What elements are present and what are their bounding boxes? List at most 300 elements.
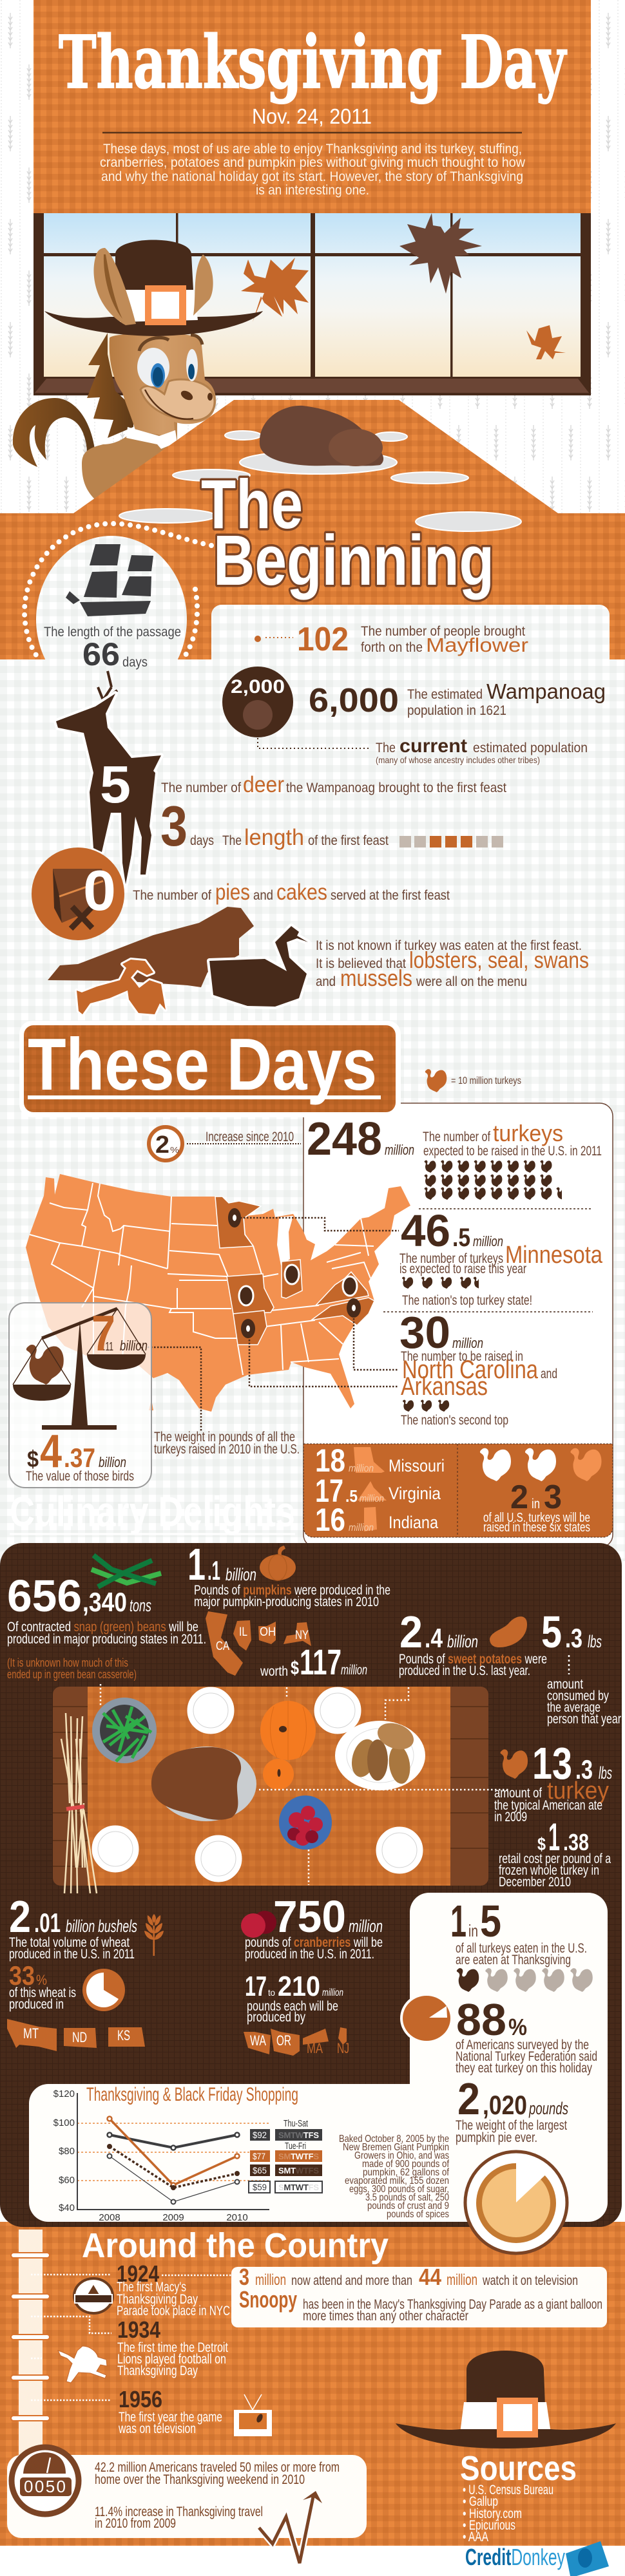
stat: wheat: 2 — [9, 1891, 31, 1942]
stat: 248 million — [307, 1113, 602, 1200]
text: weight caption — [154, 1430, 300, 1457]
callout: macy's parade: 3 — [239, 2264, 249, 2290]
line: dotted brown — [107, 2144, 240, 2190]
stat: wampanoag population: 2,000 — [231, 676, 285, 697]
illustration: pumpkin pie — [465, 2152, 567, 2253]
stat: cranberries — [241, 1891, 383, 2056]
panel: turkey weight and value: .37 — [64, 1443, 95, 1473]
panel: turkey weight and value: billion — [120, 1338, 148, 1354]
callout: macy's parade: million — [255, 2271, 286, 2289]
stat: turkey consumed: in 2009 — [494, 1810, 527, 1824]
passage stat: 66 — [82, 636, 120, 672]
two in three turkeys — [480, 1448, 602, 1535]
plates — [92, 1687, 423, 1882]
stat: largest pumpkin pie: pounds — [528, 2099, 568, 2118]
stat: sweet potatoes: lbs — [588, 1632, 602, 1651]
callout: macy's parade: 44 — [419, 2264, 441, 2290]
stat: turkey consumed: amount of — [494, 1786, 542, 1801]
stat: pies and cakes text: and — [253, 888, 273, 903]
stat: cranberries: to — [268, 1987, 275, 1998]
stat: largest pumpkin pie: eggs, 300 pounds of sugar, — [349, 2184, 449, 2195]
stat: retail cost — [499, 1815, 611, 1889]
logo: creditdonkey: CreditDonkey — [465, 2544, 565, 2570]
panel: culinary delights — [0, 1539, 622, 2253]
plates — [119, 431, 521, 531]
stat: north carolina and arkansas: million — [452, 1335, 483, 1351]
price tags and weekday bars: $65 — [253, 2165, 267, 2175]
icon: crossed-out pie with 0 — [32, 848, 124, 940]
price tags and weekday bars: Tue-Fri — [285, 2141, 306, 2152]
cranberry states: OR — [276, 2032, 291, 2049]
stat: deer text: the Wampanoag brought to the first feast — [286, 781, 506, 795]
stat: sweet potatoes: 2 — [399, 1607, 423, 1657]
stat: north carolina and arkansas: 30 — [399, 1307, 450, 1358]
passage stat: days — [122, 655, 148, 670]
white stats panel — [211, 605, 610, 798]
sources: • History.com — [463, 2506, 522, 2521]
wheat states: ND — [72, 2029, 87, 2045]
stat: wampanoag population: population in 1621 — [407, 703, 506, 718]
timeline: 1956: was on television — [118, 2421, 196, 2436]
panel: header — [34, 0, 591, 214]
panel: top states — [303, 1443, 613, 1538]
week squares — [399, 836, 503, 848]
cranberry states — [244, 2027, 349, 2056]
icon: odometer — [12, 2447, 79, 2514]
heading: the beginning: Beginning — [213, 521, 494, 600]
stat: largest pumpkin pie: 3.5 pounds of salt, 250 — [365, 2192, 449, 2203]
cranberry states: WA — [250, 2032, 266, 2049]
mane — [87, 333, 133, 438]
price tags and weekday bars: Thu-Sat — [284, 2118, 309, 2129]
indiana: million — [349, 1522, 374, 1533]
icon: wheat — [144, 1914, 164, 1956]
stat: 102 people: The number of people brought — [361, 624, 525, 639]
timeline: 1924: Thanksgiving Day — [117, 2292, 198, 2307]
stat: pies and cakes text: cakes — [276, 880, 327, 905]
stat: pies and cakes text: The number of — [133, 888, 211, 903]
stat: largest pumpkin pie: pounds of crust and 9 — [367, 2201, 449, 2211]
character: donkey in pilgrim hat — [13, 240, 263, 501]
stat: 102 people: forth on the — [361, 640, 423, 655]
text: first feast menu — [316, 938, 589, 991]
icon: pilgrim hat — [396, 2351, 616, 2448]
stat: north carolina and arkansas: North Carolina — [402, 1356, 539, 1384]
missouri — [315, 1443, 445, 1479]
sources: • AAA — [463, 2530, 488, 2544]
intro paragraph: is an interesting one. — [256, 183, 369, 198]
logo: creditdonkey — [465, 2541, 609, 2576]
timeline: 1956: 1956 — [119, 2386, 162, 2412]
panel: turkey weight and value: .11 — [103, 1340, 113, 1353]
stat: deer text — [161, 772, 506, 797]
body — [82, 419, 177, 501]
sources: • U.S. Census Bureau — [463, 2483, 553, 2497]
timeline: 1956 — [118, 2386, 272, 2436]
sources — [460, 2449, 577, 2544]
two in three turkeys: raised in these six states — [483, 1520, 590, 1535]
icon: deer with 5 — [56, 671, 161, 884]
stat: 3 days feast: of the first feast — [308, 833, 389, 848]
stat: green beans: tons — [130, 1596, 151, 1615]
stat: wampanoag population: current — [399, 735, 467, 757]
panel: turkey weight and value: $ — [27, 1446, 39, 1472]
stat: wheat: .01 — [34, 1908, 61, 1938]
stat: largest pumpkin pie: made of 900 pounds of — [362, 2159, 449, 2170]
price tags and weekday bars: SMTWTFS — [278, 2130, 319, 2140]
oval — [36, 536, 187, 703]
heading: the beginning — [201, 465, 494, 600]
stat: 88 percent: 88 — [456, 1994, 506, 2045]
two in three turkeys: 2 — [510, 1479, 528, 1516]
stat: sweet potatoes: amount — [547, 1677, 583, 1692]
sources: • Gallup — [463, 2494, 498, 2509]
passage stat: The length of the passage — [44, 625, 181, 639]
callout: macy's parade: now attend and more than — [291, 2273, 412, 2288]
platter and roast turkey — [151, 1747, 256, 1821]
icon: pumpkin — [260, 1546, 296, 1580]
stat: 102 people — [255, 621, 528, 658]
text: weight caption: turkeys raised in 2010 in the U.S. — [154, 1442, 300, 1457]
stat: deer text: The number of — [161, 781, 241, 795]
chart: thanksgiving and black friday shopping: Thanksgiving & Black Friday Shopping — [86, 2084, 298, 2105]
pumpkin states: 117 — [300, 1642, 341, 1682]
stat: 88 percent: % — [508, 2014, 527, 2040]
virginia — [315, 1473, 441, 1509]
stat: green beans: produced in major producing states in 2011. — [7, 1632, 206, 1647]
text: first feast menu: were all on the menu — [416, 974, 527, 989]
stat: cranberries: produced by — [247, 2010, 305, 2025]
heading: culinary delights (faint): Culinary Delights — [10, 1488, 295, 1535]
panel: turkey facts — [9, 1021, 613, 1548]
pumpkin states: IL — [239, 1625, 247, 1639]
stat: wampanoag population — [222, 667, 606, 765]
icon: mayflower ship — [66, 544, 153, 616]
timeline: 1924: The first Macy's — [117, 2280, 186, 2295]
cranberry states: MA — [307, 2040, 323, 2056]
price tags and weekday bars: SMTWTFS — [278, 2152, 319, 2161]
stat: 2 percent increase: Increase since 2010 — [206, 1130, 294, 1144]
pumpkin states: $ — [291, 1658, 299, 1679]
virginia: million — [360, 1493, 384, 1504]
pumpkin states: million — [341, 1663, 367, 1678]
state markers — [228, 1208, 361, 1338]
icon: swan — [209, 926, 308, 1007]
panel: turkey weight and value: 4 — [40, 1426, 62, 1477]
panel: travel: in 2010 from 2009 — [95, 2516, 176, 2531]
line: thin grey — [107, 2154, 240, 2204]
stat: 248 million: The number of — [423, 1130, 490, 1144]
stat: largest pumpkin pie: pounds of spices — [387, 2209, 449, 2220]
stat: green beans: ,340 — [82, 1587, 127, 1617]
virginia: Virginia — [389, 1484, 441, 1503]
stat: pies and cakes text: pies — [215, 880, 250, 905]
stat: wampanoag population: Wampanoag — [486, 679, 606, 703]
bowl of green beans — [92, 1698, 157, 1763]
stat: turkey consumed — [494, 1738, 612, 1824]
timeline: 1934: Lions played football on — [117, 2352, 226, 2367]
small pumpkin — [263, 1759, 294, 1790]
text: first feast menu: and — [316, 974, 336, 989]
big pumpkin — [260, 1701, 316, 1760]
indiana — [315, 1502, 439, 1538]
window with falling leaves — [34, 213, 591, 395]
intro paragraph: cranberries, potatoes and pumpkin pies without giving much thought to how — [100, 155, 526, 170]
stat: sweet potatoes: .4 — [425, 1623, 443, 1653]
stat: north carolina and arkansas — [399, 1307, 557, 1428]
stat: largest pumpkin pie: pumpkin, 62 gallons of — [363, 2167, 449, 2178]
icon: lobster — [77, 960, 166, 1014]
stat: 1 in 5 turkeys: in — [468, 1921, 478, 1940]
stat: retail cost: .38 — [563, 1829, 589, 1855]
pumpkin states: OH — [260, 1625, 276, 1639]
pie: 33 percent — [82, 1969, 125, 2011]
wheat states: MT — [23, 2025, 39, 2041]
virginia: 17 — [315, 1473, 343, 1509]
sources: Sources — [460, 2449, 577, 2488]
price tags and weekday bars: SMTWTFS — [278, 2183, 319, 2192]
two in three turkeys: of all U.S. turkeys will be — [483, 1511, 590, 1525]
stat: green beans: Of contracted snap (green) beans will be — [7, 1620, 198, 1634]
stat: 3 days feast: days — [190, 833, 214, 848]
bowl of cranberries — [279, 1795, 332, 1850]
chart: thanksgiving and black friday shopping: $80 — [59, 2146, 75, 2157]
passage stat — [44, 625, 181, 672]
legend: 10 million turkeys: = 10 million turkeys — [451, 1075, 521, 1086]
stat: 3 days feast — [160, 794, 503, 858]
panel: travel — [7, 2447, 367, 2538]
price tags and weekday bars: $92 — [253, 2130, 267, 2140]
white panels — [29, 1893, 608, 2222]
stat: minnesota: The nation's top turkey state! — [402, 1293, 532, 1308]
chart: thanksgiving and black friday shopping: 2009 — [162, 2212, 184, 2223]
timeline: 1924 — [31, 2260, 231, 2400]
stat: 1 in 5 turkeys: are eaten at Thanksgiving — [456, 1953, 571, 1967]
stat: 2 percent increase: % — [170, 1145, 180, 1155]
icon: odometer: 0050 — [24, 2477, 66, 2496]
table with turkey — [73, 400, 558, 531]
stat: 102 people: 102 — [297, 621, 349, 658]
stat: north carolina and arkansas: Arkansas — [401, 1372, 488, 1401]
price tags and weekday bars: $77 — [253, 2151, 265, 2161]
stat: north carolina and arkansas: The nation's second top — [401, 1413, 508, 1428]
head — [110, 334, 216, 438]
heading: the beginning: The — [201, 465, 303, 543]
roast turkey — [260, 406, 383, 466]
stat: turkey consumed: 13 — [532, 1738, 572, 1788]
timeline: 1956: The first year the game — [119, 2410, 222, 2425]
intro paragraph: These days, most of us are able to enjoy Thanksgiving and its turkey, stuffing, — [103, 142, 522, 156]
stat: pies and cakes text: served at the first feast — [331, 888, 450, 903]
stat: cranberries: pounds of cranberries will be — [245, 1935, 383, 1950]
indiana: 16 — [315, 1502, 345, 1538]
callout: macy's parade: more times than any other character — [303, 2309, 468, 2324]
stat: pumpkins: .1 — [207, 1555, 220, 1586]
virginia: .5 — [345, 1486, 358, 1506]
missouri: Missouri — [389, 1456, 445, 1475]
intro paragraph: and why the national holiday got its start. However, the story of Thanksgiving — [101, 169, 523, 184]
connector lines — [148, 1218, 399, 1432]
stat: wheat: produced in the U.S. in 2011 — [9, 1947, 135, 1962]
panel: travel: home over the Thanksgiving weekend in 2010 — [95, 2472, 305, 2487]
stat: cranberries: 17 — [245, 1971, 267, 2002]
stat: 102 people: Mayflower — [426, 634, 528, 656]
timeline bar — [11, 2230, 50, 2481]
callout: macy's parade: watch it on television — [482, 2273, 578, 2288]
price tags and weekday bars — [249, 2118, 322, 2193]
wheat states — [7, 2019, 145, 2051]
stat: sweet potatoes: .3 — [565, 1623, 582, 1653]
stat: pumpkins: Pounds of pumpkins were produced in the — [194, 1583, 390, 1598]
plate of sweet potatoes — [335, 1718, 425, 1790]
illustration: dinner table from above — [53, 1684, 510, 1893]
wheat bundle — [61, 1713, 97, 1893]
panel: turkey weight and value: The value of those birds — [26, 1469, 134, 1484]
stat: 2 percent increase — [149, 1127, 301, 1160]
icon: orange leaf — [241, 258, 309, 322]
panel: turkey weight and value: billion — [99, 1454, 126, 1470]
stat: largest pumpkin pie: pumpkin pie ever. — [456, 2130, 537, 2145]
icon: parade badge — [74, 2278, 113, 2313]
stat: wheat: of this wheat is — [9, 1985, 76, 2000]
stat: pumpkins: 1 — [188, 1539, 206, 1589]
pumpkin states: worth — [260, 1664, 288, 1679]
chart: thanksgiving and black friday shopping: 2010 — [226, 2212, 248, 2223]
intro paragraph — [100, 142, 526, 198]
missouri: 18 — [315, 1443, 345, 1479]
text: first feast menu: mussels — [340, 965, 412, 991]
stat: 2 percent increase: 2 — [155, 1132, 169, 1159]
stat: cranberries: produced in the U.S. in 2011. — [245, 1947, 374, 1962]
stat: largest pumpkin pie: Growers in Ohio, and was — [354, 2150, 449, 2161]
stat: pies and cakes text — [133, 880, 450, 905]
price tags and weekday bars: $59 — [253, 2182, 267, 2192]
stat: green beans: 656 — [7, 1571, 82, 1621]
timeline: 1934: Thanksgiving Day — [117, 2363, 198, 2378]
stat: turkey consumed: .3 — [575, 1754, 593, 1785]
timeline: 1934: The first time the Detroit — [117, 2340, 228, 2355]
text: first feast menu: It is believed that — [316, 956, 406, 971]
dotted ring — [24, 524, 211, 655]
stat: wheat — [7, 1891, 164, 2051]
callout: macy's parade: million — [447, 2271, 477, 2289]
stat: 88 percent — [400, 1993, 597, 2076]
stat: cranberries: 750 — [273, 1891, 346, 1942]
panel: turkey weight and value: 7 — [91, 1305, 115, 1361]
line: orange — [107, 2116, 240, 2187]
panel: travel: 42.2 million Americans traveled 50 miles or more from — [95, 2460, 340, 2475]
turkey pictogram — [424, 1160, 568, 1200]
stat: wampanoag population: The — [376, 741, 396, 755]
chart: thanksgiving and black friday shopping — [53, 2084, 322, 2223]
stat: wheat: billion bushels — [66, 1917, 137, 1936]
stat: 248 million: million — [385, 1142, 414, 1158]
stat: green beans: (It is unknown how much of this — [7, 1656, 128, 1669]
stat: pumpkins — [188, 1539, 390, 1609]
timeline: 1934: 1934 — [117, 2316, 160, 2343]
indiana: Indiana — [389, 1513, 439, 1532]
state lines — [30, 1183, 374, 1375]
panel: around the country — [7, 2226, 616, 2544]
stat: 3 days feast: 3 — [160, 794, 188, 858]
two in three turkeys: 3 — [544, 1479, 562, 1516]
muzzle — [140, 379, 215, 421]
pumpkin states: CA — [216, 1640, 229, 1653]
stat: 248 million: turkeys — [493, 1120, 563, 1146]
stat: sweet potatoes: Pounds of sweet potatoes were — [399, 1652, 547, 1667]
stat: wheat: 33 — [9, 1960, 35, 1991]
stat: sweet potatoes: 5 — [541, 1607, 562, 1657]
icon: crossed-out pie with 0: 0 — [83, 858, 116, 922]
stat: 3 days feast: length — [244, 825, 304, 850]
stat: cranberries: million — [349, 1917, 383, 1936]
icon: television — [234, 2394, 272, 2436]
stat: minnesota: Minnesota — [505, 1242, 603, 1269]
ears — [93, 248, 136, 325]
stat: retail cost: 1 — [548, 1815, 560, 1859]
heading: around the country: Around the Country — [82, 2226, 389, 2265]
text: weight caption: The weight in pounds of all the — [154, 1430, 295, 1444]
stat: minnesota: .5 — [452, 1224, 470, 1252]
stat: retail cost: $ — [537, 1834, 546, 1854]
pumpkin states: NY — [295, 1629, 309, 1642]
stat: minnesota: million — [473, 1233, 503, 1249]
stat: minnesota: 46 — [401, 1206, 450, 1256]
stat: pumpkins: billion — [226, 1565, 256, 1584]
stat: largest pumpkin pie: 2 — [457, 2074, 480, 2124]
pumpkin states — [206, 1611, 367, 1682]
stat: wampanoag population: (many of whose ancestry includes other tribes) — [376, 755, 540, 765]
text: first feast menu: lobsters, seal, swans — [409, 947, 589, 973]
line: dark grey — [107, 2133, 240, 2150]
stat: wheat: % — [36, 1972, 47, 1988]
stat: sweet potatoes: billion — [447, 1632, 478, 1651]
wheat states: KS — [117, 2027, 130, 2043]
stat: wampanoag population: 6,000 — [309, 682, 399, 719]
collar — [126, 427, 177, 449]
panel: travel: 11.4% increase in Thanksgiving travel — [95, 2505, 263, 2519]
timeline: 1934 — [58, 2316, 228, 2383]
missouri: million — [349, 1463, 374, 1474]
eyes — [137, 348, 169, 386]
stat: wampanoag population: estimated population — [473, 741, 588, 755]
stat: green beans: ended up in green bean casserole) — [7, 1668, 137, 1681]
chart: thanksgiving and black friday shopping: $40 — [59, 2202, 75, 2213]
stat: cranberries: million — [322, 1987, 343, 1998]
stat: north carolina and arkansas: The number to be raised in — [401, 1349, 523, 1364]
panel: the beginning — [24, 465, 610, 1014]
icon: balance scale — [13, 1309, 146, 1430]
stat: 1 in 5 turkeys — [450, 1896, 593, 1992]
map of the us — [26, 1174, 410, 1432]
stat: green beans — [7, 1555, 206, 1681]
chart: thanksgiving and black friday shopping: $100 — [53, 2117, 75, 2128]
icon: detroit lion — [58, 2346, 107, 2383]
stat: 248 million: 248 — [307, 1113, 382, 1165]
text: first feast menu: It is not known if turkey was eaten at the first feast. — [316, 938, 582, 953]
timeline: 1924: 1924 — [117, 2260, 159, 2287]
tail — [13, 398, 95, 467]
icon: brown leaf — [399, 213, 482, 294]
price tags and weekday bars: SMTWTFS — [278, 2166, 319, 2175]
icon: deer with 5: 5 — [100, 755, 131, 814]
stat: wheat: produced in — [9, 1997, 64, 2012]
stat: largest pumpkin pie — [339, 2074, 568, 2220]
stat: minnesota: The number of turkeys — [399, 1251, 503, 1266]
stat: cranberries: 210 — [278, 1971, 320, 2002]
stat: deer text: deer — [243, 772, 284, 797]
stat: minnesota: is expected to raise this year — [399, 1262, 526, 1276]
